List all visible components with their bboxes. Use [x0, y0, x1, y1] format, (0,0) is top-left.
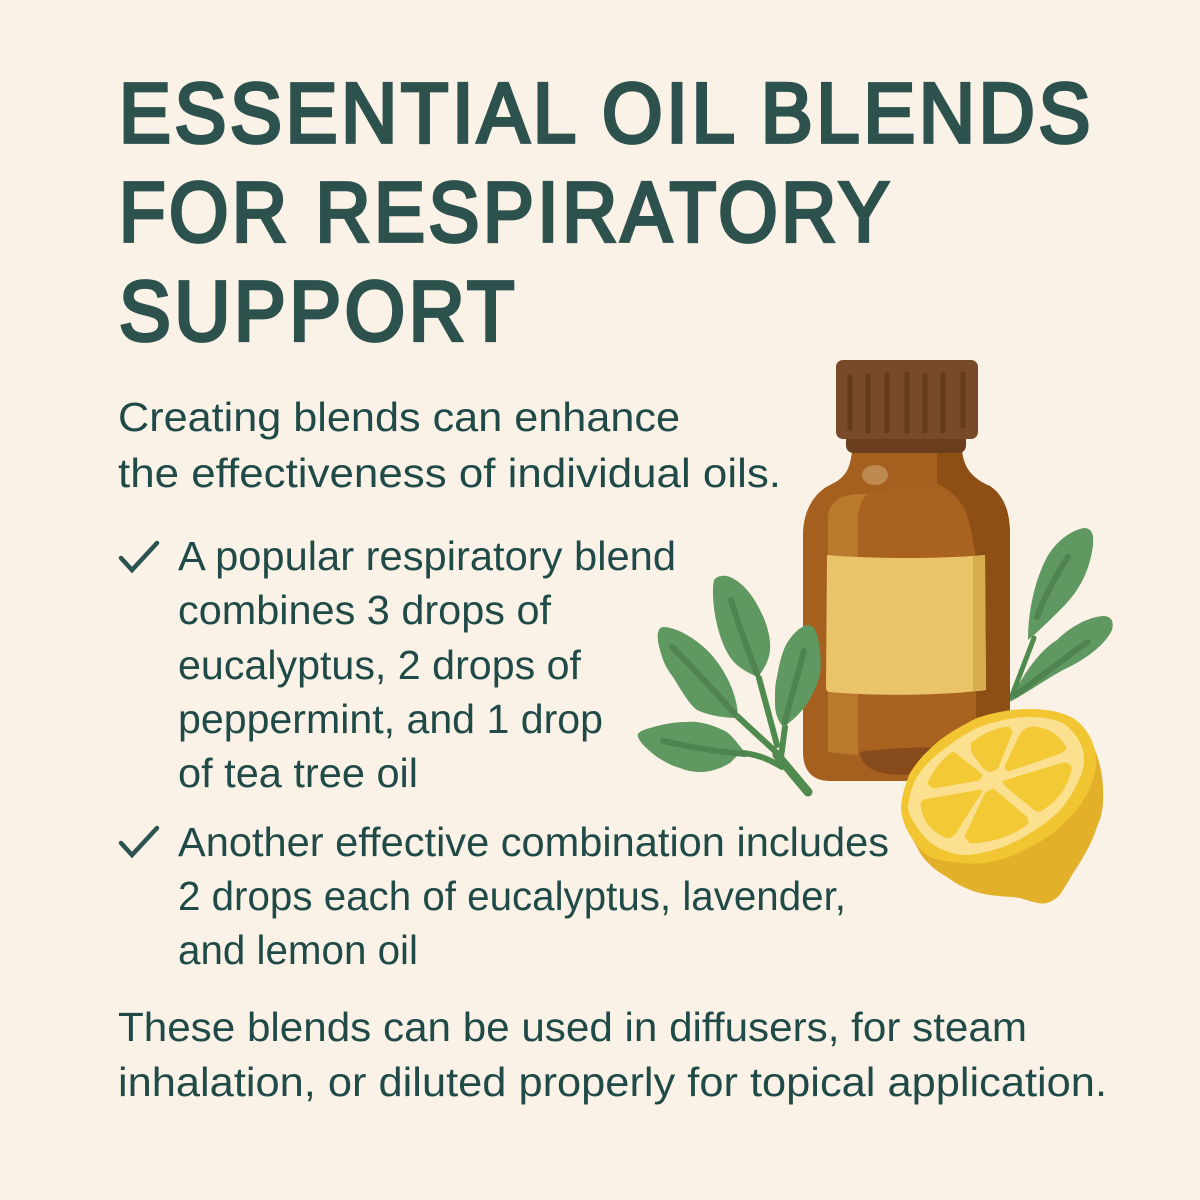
list item 1: eucalyptus, 2 drops of [178, 642, 582, 688]
segments [922, 728, 1070, 842]
list item 2: Another effective combination includes [178, 819, 889, 865]
bottle body [803, 451, 1010, 781]
center glass [858, 487, 976, 750]
icon: check mark 2 [121, 828, 157, 855]
title [119, 66, 1094, 358]
cut face outer [901, 709, 1096, 864]
bottom liquid shadow [860, 747, 960, 775]
cap [836, 360, 978, 439]
pith [908, 717, 1084, 855]
right shadow [937, 451, 1010, 781]
closing text: inhalation, or diluted properly for topical application. [118, 1059, 1107, 1105]
left highlight [828, 494, 868, 755]
stems [737, 678, 808, 792]
leaf D [638, 722, 743, 772]
intro text [118, 394, 781, 496]
cap ridges [850, 374, 963, 432]
list item 2 [178, 819, 889, 973]
icon: right leaf sprig [1010, 528, 1113, 702]
title: FOR RESPIRATORY [119, 165, 893, 259]
list item 2: and lemon oil [178, 927, 418, 973]
lemon rind body [913, 750, 1103, 904]
icon: check mark 1 [121, 543, 157, 570]
list item 1: of tea tree oil [178, 750, 418, 796]
leaf B [713, 576, 770, 677]
leaf C [775, 625, 821, 727]
list item 1: A popular respiratory blend [178, 533, 676, 579]
intro text: Creating blends can enhance [118, 394, 680, 440]
closing text: These blends can be used in diffusers, for steam [118, 1004, 1027, 1050]
collar [846, 436, 966, 453]
title: ESSENTIAL OIL BLENDS [119, 66, 1094, 160]
title: SUPPORT [119, 264, 518, 358]
intro text: the effectiveness of individual oils. [118, 450, 781, 496]
leaf A [658, 627, 738, 718]
highlight spot [862, 465, 888, 485]
label [826, 555, 986, 695]
closing text [118, 1004, 1107, 1105]
icon: left leaf sprig [638, 576, 821, 792]
icon: amber bottle [803, 360, 1010, 781]
list item 1: peppermint, and 1 drop [178, 696, 603, 742]
list item 2: 2 drops each of eucalyptus, lavender, [178, 873, 846, 919]
icon: lemon half [901, 709, 1103, 904]
list item 1 [178, 533, 676, 796]
list item 1: combines 3 drops of [178, 587, 552, 633]
